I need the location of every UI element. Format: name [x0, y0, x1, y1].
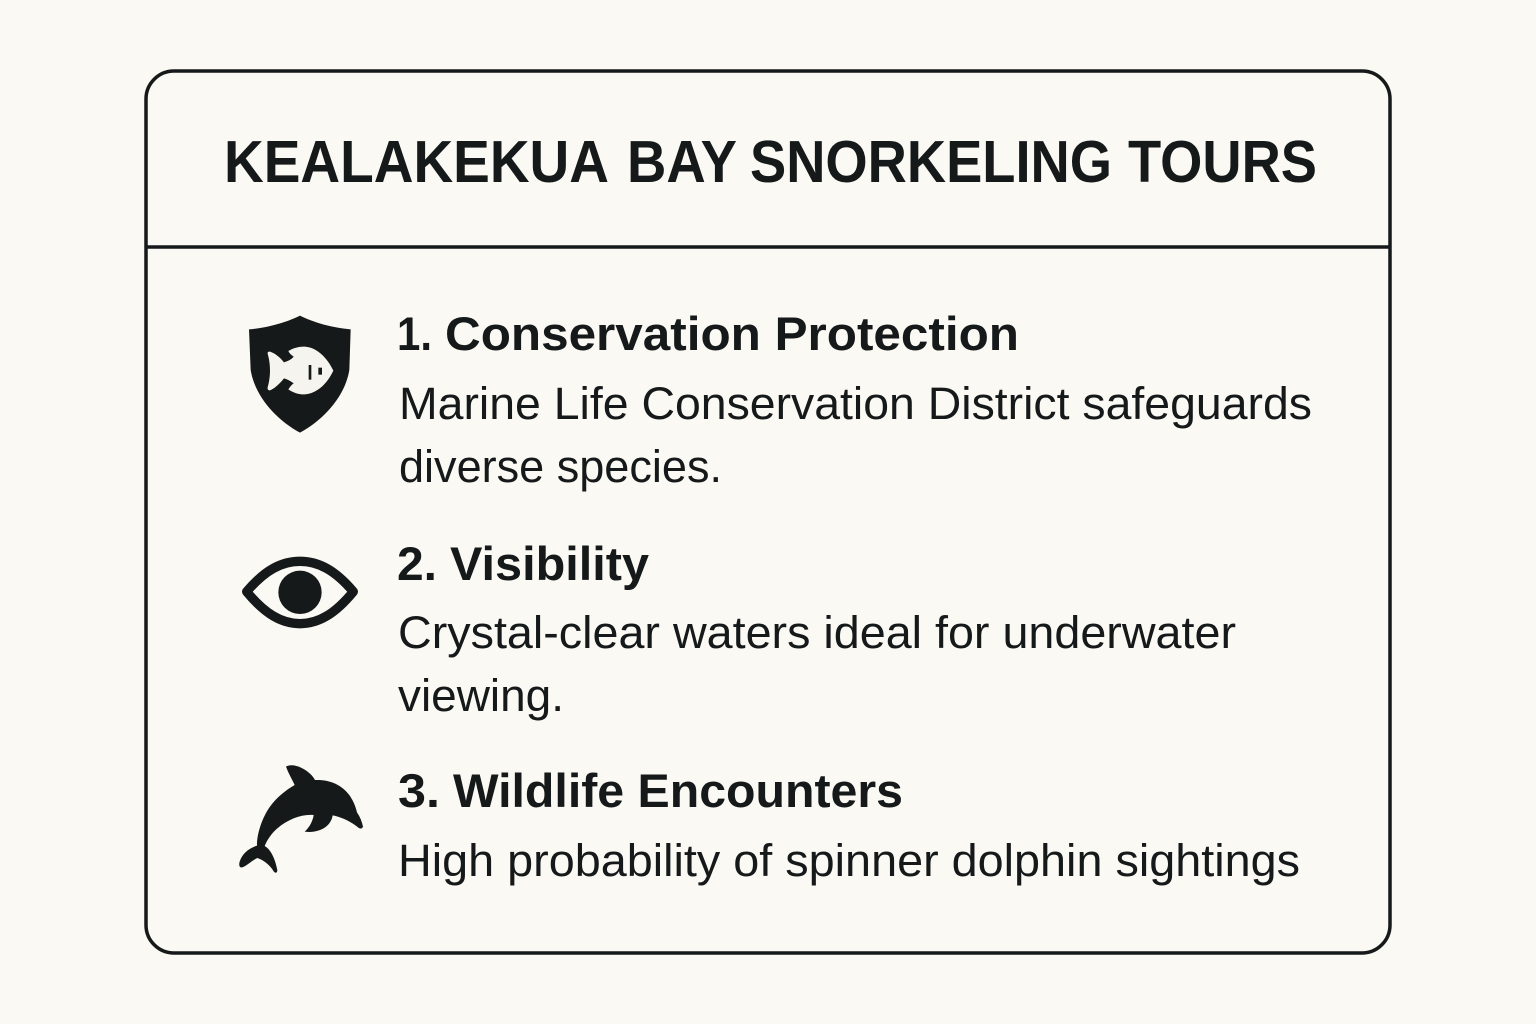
heading: conservation protection: Conservation Protection	[445, 307, 1019, 360]
text: conservation description: Marine Life Conservation District safeguards	[399, 378, 1312, 429]
text: conservation description	[399, 378, 1312, 492]
heading: visibility: Visibility	[450, 537, 649, 590]
heading: visibility: 2.	[397, 537, 437, 590]
icon: eye	[247, 561, 353, 624]
title: BAY	[627, 129, 737, 195]
title	[224, 129, 1317, 195]
icon: shield with fish	[249, 316, 351, 433]
heading: conservation protection: 1.	[397, 307, 432, 360]
text: visibility description: viewing.	[398, 670, 564, 721]
title: TOURS	[1128, 129, 1317, 195]
title: KEALAKEKUA	[224, 129, 609, 195]
text: conservation description: diverse species.	[399, 441, 722, 492]
text: wildlife description: High probability of spinner dolphin sightings	[398, 835, 1300, 886]
heading: wildlife encounters: 3.	[398, 764, 440, 817]
panel: card	[146, 71, 1390, 953]
title: SNORKELING	[750, 129, 1112, 195]
text: visibility description: Crystal-clear waters ideal for underwater	[398, 607, 1236, 658]
text: visibility description	[398, 607, 1236, 721]
icon: dolphin	[239, 765, 363, 873]
heading: wildlife encounters: Wildlife Encounters	[453, 764, 903, 817]
